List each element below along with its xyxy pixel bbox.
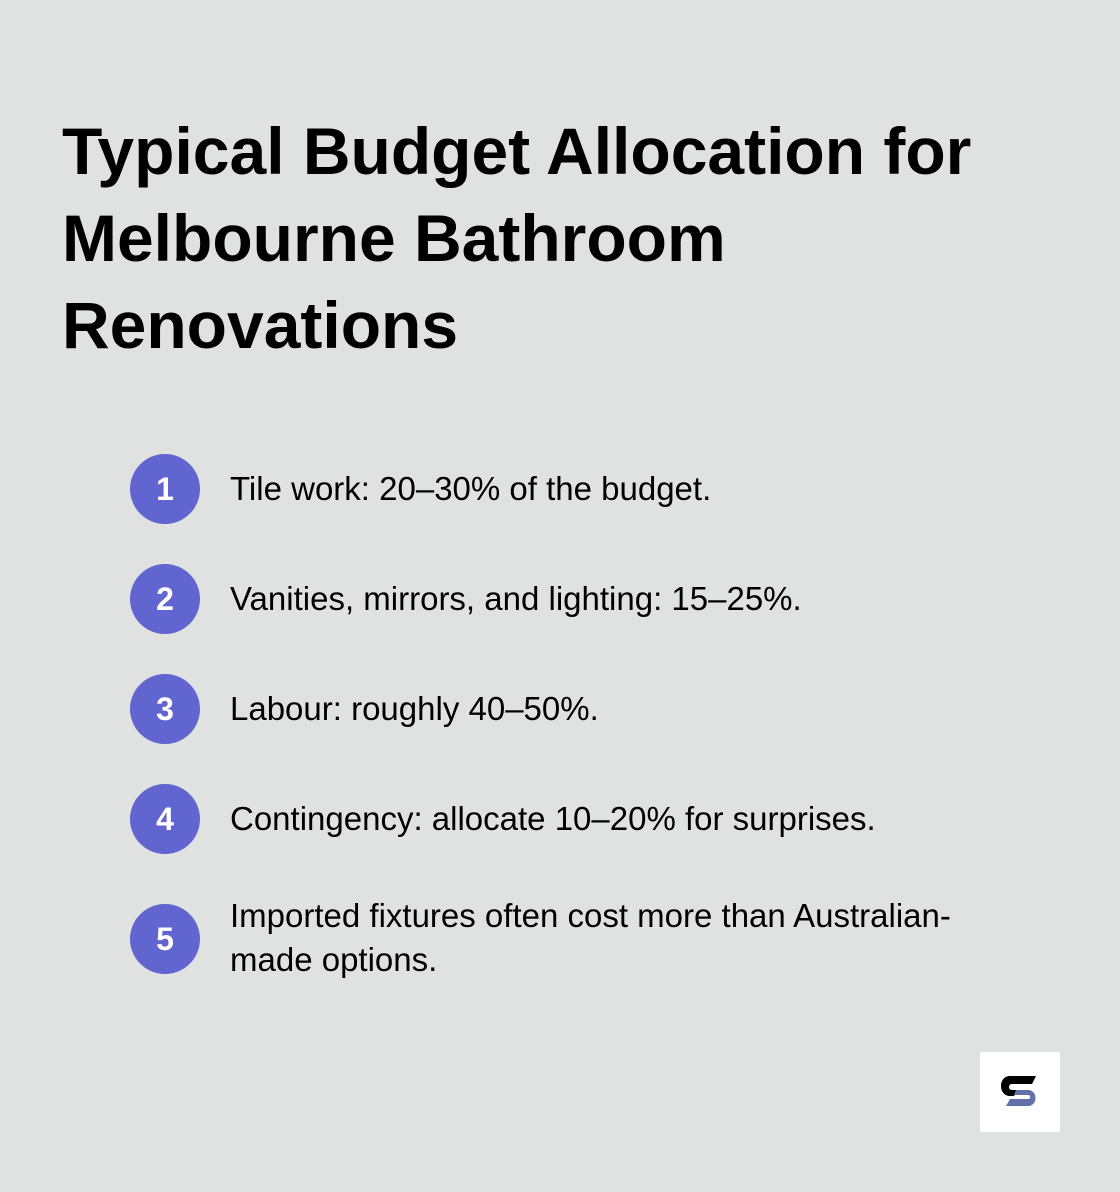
item 1: 1 xyxy=(156,471,174,507)
item 4 xyxy=(130,784,876,854)
item 4: Contingency: allocate 10–20% for surprises. xyxy=(230,800,876,837)
item 2: 2 xyxy=(156,581,174,617)
item 5: 5 xyxy=(156,921,174,957)
title: Renovations xyxy=(62,288,458,362)
item 3: Labour: roughly 40–50%. xyxy=(230,690,599,727)
item 1: Tile work: 20–30% of the budget. xyxy=(230,470,711,507)
logo xyxy=(980,1052,1060,1132)
item 1 xyxy=(130,454,711,524)
item 2: Vanities, mirrors, and lighting: 15–25%. xyxy=(230,580,802,617)
item 3: 3 xyxy=(156,691,174,727)
item 4: 4 xyxy=(156,801,174,837)
item 5 xyxy=(130,897,951,978)
title: Melbourne Bathroom xyxy=(62,201,726,275)
item 5: made options. xyxy=(230,941,437,978)
title xyxy=(62,114,971,362)
item 3 xyxy=(130,674,599,744)
item 2 xyxy=(130,564,802,634)
title: Typical Budget Allocation for xyxy=(62,114,971,188)
item 5: Imported fixtures often cost more than Australian- xyxy=(230,897,951,934)
